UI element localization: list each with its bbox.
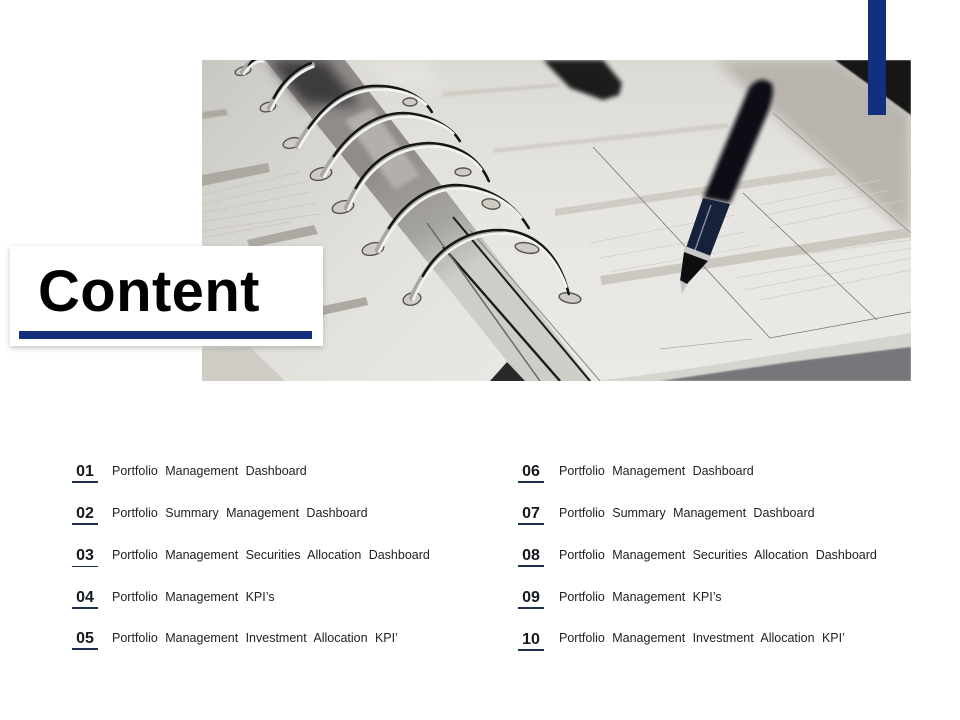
list item 07 bbox=[518, 505, 815, 525]
list item 01: 01 bbox=[76, 463, 94, 480]
list item 08 bbox=[518, 547, 877, 567]
list item 09: Portfolio Management KPI’s bbox=[559, 590, 722, 604]
list item 03: 03 bbox=[76, 547, 94, 564]
photo: open ring-binder planner with pen bbox=[202, 60, 911, 381]
list item 05: 05 bbox=[76, 630, 94, 647]
list item 08: Portfolio Management Securities Allocation Dashboard bbox=[559, 548, 877, 562]
list item 04 bbox=[72, 589, 275, 609]
list item 03: Portfolio Management Securities Allocation Dashboard bbox=[112, 548, 430, 562]
ring tubes: mid tone bbox=[243, 60, 500, 298]
top margin of right page bbox=[715, 60, 911, 235]
list item 09: 09 bbox=[522, 589, 540, 606]
list item 06 bbox=[518, 463, 754, 483]
pen cap top bbox=[543, 60, 622, 100]
list item 10: 10 bbox=[522, 631, 540, 648]
list item 03 bbox=[72, 547, 430, 567]
list item 05 bbox=[72, 630, 398, 650]
title panel bbox=[10, 246, 323, 346]
list item 01: Portfolio Management Dashboard bbox=[112, 464, 307, 478]
table grid lines bbox=[593, 113, 911, 349]
list item 02: Portfolio Summary Management Dashboard bbox=[112, 506, 368, 520]
ring tubes: chrome highlight bbox=[244, 61, 566, 300]
rings bbox=[234, 58, 582, 307]
list item 07: 07 bbox=[522, 505, 540, 522]
ring tubes: dark outer edge bbox=[249, 58, 569, 294]
heading: Content bbox=[38, 259, 260, 324]
list item 09 bbox=[518, 589, 722, 609]
dark corner top right bbox=[835, 60, 911, 115]
ruled lines on right page bbox=[590, 180, 911, 300]
beige bands bbox=[443, 83, 911, 285]
list item 05: Portfolio Management Investment Allocation KPI’ bbox=[112, 631, 398, 645]
list item 02: 02 bbox=[76, 505, 94, 522]
pen bbox=[680, 80, 773, 294]
accent bar: top right bbox=[868, 0, 886, 115]
list item 10 bbox=[518, 631, 845, 651]
list item 06: 06 bbox=[522, 463, 540, 480]
title underline bbox=[19, 331, 312, 339]
list item 04: Portfolio Management KPI’s bbox=[112, 590, 275, 604]
page stack bottom right bbox=[596, 333, 911, 381]
list item 10: Portfolio Management Investment Allocation KPI’ bbox=[559, 631, 845, 645]
right page base bbox=[202, 60, 911, 381]
list item 02 bbox=[72, 505, 368, 525]
list item 08: 08 bbox=[522, 547, 540, 564]
list item 07: Portfolio Summary Management Dashboard bbox=[559, 506, 815, 520]
lower page corner and dark gap bbox=[490, 362, 525, 381]
spine bbox=[265, 60, 592, 381]
list item 06: Portfolio Management Dashboard bbox=[559, 464, 754, 478]
list item 01 bbox=[72, 463, 307, 483]
list item 04: 04 bbox=[76, 589, 94, 606]
left page bbox=[202, 60, 523, 381]
